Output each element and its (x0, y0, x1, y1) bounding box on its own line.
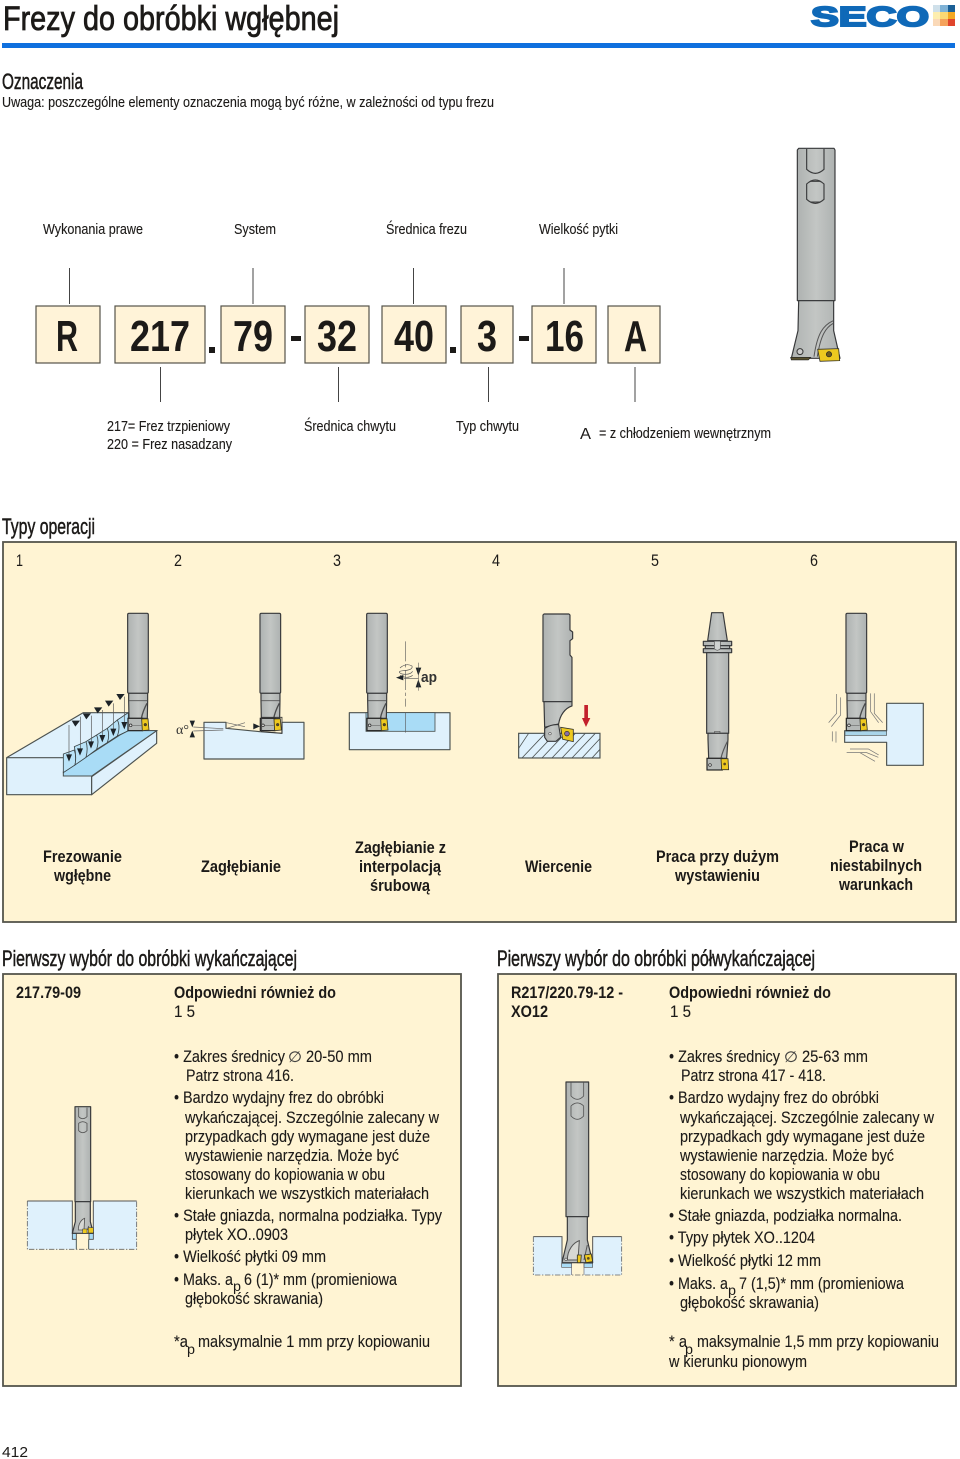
feature list: • Wielkość płytki 12 mm (669, 1251, 821, 1270)
operation labels: śrubową (370, 876, 430, 895)
feature list: kierunkach we wszystkich materiałach (680, 1184, 924, 1203)
code boxes: 32 (317, 312, 357, 361)
illustration 5: long overhang (703, 613, 732, 770)
feature list: 25-63 mm (802, 1047, 868, 1066)
code boxes: 217 (130, 312, 190, 361)
panel: finishing (3, 974, 461, 1386)
product code: XO12 (511, 1002, 548, 1021)
feature list: przypadkach gdy wymagane jest duże (185, 1127, 430, 1146)
feature list: ∅ (288, 1048, 302, 1066)
operation labels: niestabilnych (830, 856, 922, 875)
upper labels: Wykonania prawe (43, 221, 143, 238)
operation numbers: 1 (16, 551, 23, 570)
operation labels: Frezowanie (43, 847, 122, 866)
code boxes: 3 (477, 312, 497, 361)
feature list: • Maks. a (174, 1270, 233, 1289)
heading: finishing first choice: Pierwszy wybór do obróbki wykańczającej (2, 946, 297, 971)
feature list: głębokość skrawania) (185, 1289, 323, 1308)
label: alpha angle: α° (176, 723, 189, 738)
feature list: stosowany do kopiowania w obu (680, 1165, 880, 1184)
feature list: 20-50 mm (306, 1047, 372, 1066)
code boxes: 16 (545, 312, 584, 361)
operation labels: interpolacją (359, 857, 441, 876)
product code: R217/220.79-12 - (511, 983, 623, 1002)
feature list: • Zakres średnicy (669, 1047, 780, 1066)
footnote: p (187, 1341, 195, 1357)
feature list: wystawienie narzędzia. Może być (679, 1146, 894, 1165)
feature list (174, 1047, 442, 1308)
illustration 1: deep milling (7, 613, 157, 795)
product code (511, 983, 623, 1021)
feature list: • Stałe gniazda, podziałka normalna. (669, 1206, 902, 1225)
feature list: • Wielkość płytki 09 mm (174, 1247, 326, 1266)
panel: operation types (3, 542, 956, 922)
operation numbers: 2 (174, 551, 182, 570)
operation labels (43, 837, 922, 895)
lower labels: 220 = Frez nasadzany (107, 436, 232, 453)
operation numbers: 4 (492, 551, 500, 570)
title: Frezy do obróbki wgłębnej (3, 0, 339, 38)
footnote (668, 1332, 939, 1371)
upper labels: Wielkość pytki (539, 221, 618, 238)
feature list: wystawienie narzędzia. Może być (184, 1146, 399, 1165)
footnote: * a (669, 1332, 687, 1351)
feature list: 7 (1,5)* mm (promieniowa (739, 1274, 904, 1293)
lower labels: 217= Frez trzpieniowy (107, 418, 230, 435)
product code: 217.79-09 (16, 983, 81, 1002)
upper labels: Średnica frezu (386, 220, 467, 238)
suitable also for (669, 983, 831, 1021)
feature list: wykańczającej. Szczególnie zalecany w (184, 1108, 440, 1127)
operation labels: wgłębne (53, 866, 111, 885)
header rule (2, 43, 955, 48)
suitable also for: 1 5 (670, 1002, 691, 1021)
illustration 6: unstable conditions (829, 613, 923, 765)
heading: semi-finishing first choice: Pierwszy wybór do obróbki półwykańczającej (497, 946, 815, 971)
code boxes: R (56, 312, 78, 361)
footnote: p (685, 1341, 693, 1357)
suitable also for (174, 983, 336, 1021)
feature list: Patrz strona 416. (186, 1066, 294, 1085)
code boxes: 40 (394, 312, 434, 361)
feature list: płytek XO..0903 (185, 1225, 288, 1244)
lower labels: A (580, 426, 591, 443)
operation labels: warunkach (838, 875, 913, 894)
feature list: głębokość skrawania) (680, 1293, 819, 1312)
feature list: stosowany do kopiowania w obu (185, 1165, 385, 1184)
lower labels (107, 417, 771, 453)
feature list (669, 1047, 935, 1312)
operation labels: Praca przy dużym (656, 847, 779, 866)
feature list: Patrz strona 417 - 418. (681, 1066, 826, 1085)
upper labels: System (234, 221, 276, 238)
illustration 3: helical interpolation (349, 613, 450, 750)
code boxes: 79 (233, 312, 273, 361)
feature list: przypadkach gdy wymagane jest duże (680, 1127, 925, 1146)
illustration 2: plunging (190, 613, 304, 759)
note: Uwaga: poszczególne elementy oznaczenia mogą być różne, w zależności od typu frezu (2, 94, 494, 111)
logo: SECO (811, 1, 955, 32)
illustration 4: drilling (519, 614, 600, 758)
feature list: p (233, 1278, 241, 1294)
operation numbers: 5 (651, 551, 659, 570)
feature list: kierunkach we wszystkich materiałach (185, 1184, 429, 1203)
tool illustration (533, 1082, 622, 1275)
operation labels: Zagłębianie z (355, 838, 446, 857)
operation labels: Wiercenie (525, 857, 592, 876)
footnote (174, 1332, 430, 1357)
heading: Oznaczenia: Oznaczenia (2, 69, 84, 94)
feature list: • Bardzo wydajny frez do obróbki (669, 1088, 879, 1107)
operation labels: Zagłębianie (201, 857, 281, 876)
feature list: ∅ (784, 1048, 798, 1066)
operation numbers (16, 551, 818, 570)
code boxes (36, 306, 660, 363)
feature list: • Zakres średnicy (174, 1047, 285, 1066)
suitable also for: 1 5 (174, 1002, 195, 1021)
upper labels (43, 220, 635, 402)
operation labels: Praca w (849, 837, 905, 856)
tool illustration (27, 1107, 137, 1249)
label: ap: ap (421, 669, 437, 686)
lower labels: Typ chwytu (456, 418, 519, 435)
icon: end mill side view (791, 148, 840, 361)
suitable also for: Odpowiedni również do (669, 983, 831, 1002)
lower labels: Średnica chwytu (304, 417, 396, 435)
feature list: • Maks. a (669, 1274, 728, 1293)
heading: Typy operacji: Typy operacji (2, 514, 95, 539)
panel: semi-finishing (498, 974, 956, 1386)
feature list: p (728, 1282, 736, 1298)
operation labels: wystawieniu (674, 866, 760, 885)
code boxes: A (624, 312, 647, 361)
footnote: w kierunku pionowym (668, 1352, 807, 1371)
feature list: • Typy płytek XO..1204 (669, 1228, 815, 1247)
logo: SECO: SECO (811, 1, 929, 32)
footnote: *a (174, 1332, 188, 1351)
suitable also for: Odpowiedni również do (174, 983, 336, 1002)
feature list: • Bardzo wydajny frez do obróbki (174, 1088, 384, 1107)
feature list: 6 (1)* mm (promieniowa (244, 1270, 397, 1289)
lower labels: = z chłodzeniem wewnętrznym (599, 425, 771, 442)
footnote: maksymalnie 1 mm przy kopiowaniu (198, 1332, 430, 1351)
designation code diagram (36, 220, 771, 453)
operation numbers: 3 (333, 551, 341, 570)
feature list: • Stałe gniazda, normalna podziałka. Typy (174, 1206, 442, 1225)
operation numbers: 6 (810, 551, 818, 570)
